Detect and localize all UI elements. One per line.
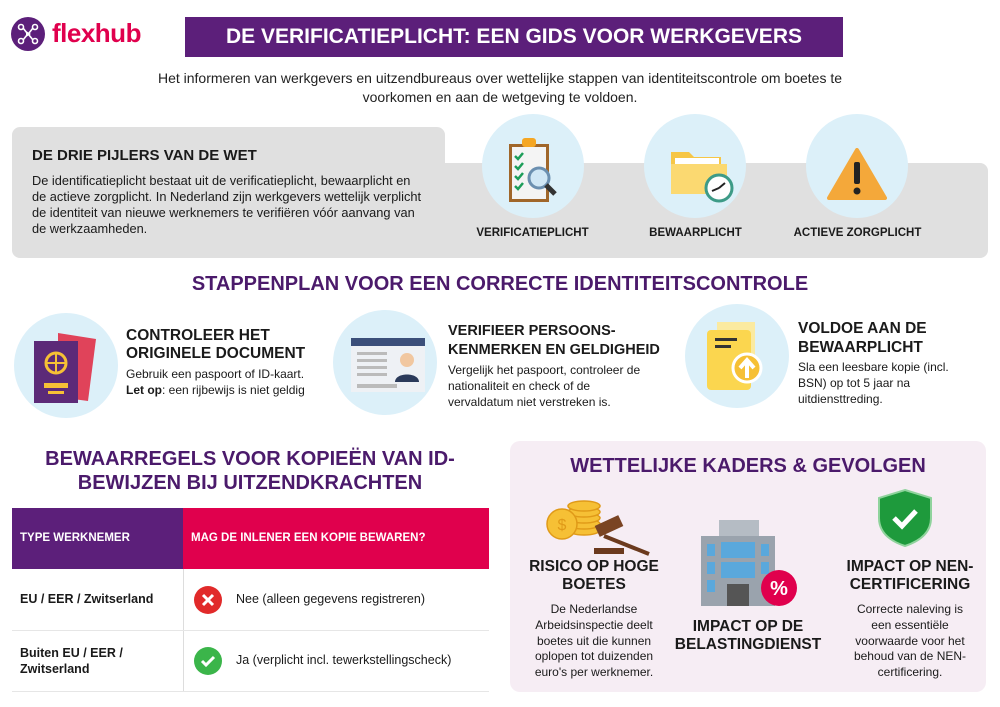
label: actieve zorgplicht: ACTIEVE ZORGPLICHT [794, 227, 921, 239]
row: buiten EU: Zwitserland [20, 662, 89, 676]
heading: verifieer: VERIFIEER PERSOONS- [448, 323, 616, 339]
pillar: bewaarplicht [644, 114, 746, 239]
icon: document upload [707, 322, 762, 390]
heading: controleer [126, 327, 305, 362]
icon: passports [34, 333, 96, 403]
row: EU: EU / EER / Zwitserland [20, 592, 153, 606]
table header [12, 508, 183, 569]
icon: building with percent [701, 520, 797, 606]
table header: TYPE WERKNEMER [20, 532, 130, 544]
label: bewaarplicht: BEWAARPLICHT [649, 227, 742, 239]
icon: warning triangle [827, 148, 887, 200]
row: buiten EU: Buiten EU / EER / [20, 646, 123, 660]
icon: building with percent: % [770, 578, 788, 600]
subtitle: Het informeren van werkgevers en uitzendbureaus over wettelijke stappen van identiteitscontrole om boetes te voorkomen en aan de wetgeving te voldoen. [158, 70, 842, 105]
table: bewaarregels [12, 508, 489, 692]
step 1 [14, 313, 305, 418]
step 2 [333, 310, 660, 415]
text: controleer: Gebruik een paspoort of ID-kaart. [126, 367, 304, 381]
column: NEN [847, 489, 973, 679]
icon: coins and gavel [546, 500, 650, 556]
heading: NEN: IMPACT OP NEN-CERTIFICERING [847, 558, 973, 593]
heading: belastingdienst: IMPACT OP DE BELASTINGDIENST [675, 618, 821, 653]
table: bewaarregels: Ja (verplicht incl. tewerkstellingscheck) [236, 653, 451, 667]
pillar: actieve zorgplicht [794, 114, 922, 239]
heading: wettelijke kaders: WETTELIJKE KADERS & GEVOLGEN [570, 455, 926, 477]
text: voldoe: Sla een leesbare kopie (incl. BSN) op tot 5 jaar na uitdiensttreding. [798, 360, 949, 406]
logo [11, 17, 141, 51]
heading: boetes: RISICO OP HOGE BOETES [529, 558, 659, 593]
row: buiten EU [20, 646, 123, 676]
panel: drie pijlers [12, 127, 988, 258]
table: bewaarregels: Nee (alleen gegevens registreren) [236, 592, 425, 606]
icon: check [194, 647, 222, 675]
heading: controleer: CONTROLEER HET [126, 327, 270, 344]
heading: stappenplan: STAPPENPLAN VOOR EEN CORRECTE IDENTITEITSCONTROLE [192, 273, 808, 295]
heading: voldoe: BEWAARPLICHT [798, 339, 923, 356]
heading: bewaarregels: BEWAARREGELS VOOR KOPIEËN VAN ID-BEWIJZEN BIJ UITZENDKRACHTEN [45, 448, 455, 494]
text: boetes: De Nederlandse Arbeidsinspectie deelt boetes uit die kunnen oplopen tot duizenden euro's per werknemer. [535, 602, 653, 679]
heading: voldoe [798, 320, 927, 356]
icon: clipboard [509, 138, 557, 202]
text: pijlers uitleg: De identificatieplicht bestaat uit de verificatieplicht, bewaarplicht en de actieve zorgplicht. In Nederland zijn werkgevers wettelijk verplicht de identiteit van nieuwe werknemers te verifiëren vóór aanvang van de werkzaamheden. [32, 173, 421, 236]
title [185, 17, 843, 57]
icon: logo mark [11, 17, 45, 51]
icon: shield [878, 489, 932, 547]
icon: folder with clock [671, 152, 734, 202]
title: DE VERIFICATIEPLICHT: EEN GIDS VOOR WERKGEVERS [226, 25, 802, 48]
column: boetes [529, 500, 659, 679]
label: verificatieplicht: VERIFICATIEPLICHT [476, 227, 589, 239]
pillar: verificatieplicht [476, 114, 589, 239]
text: NEN: Correcte naleving is een essentiële voorwaarde voor het behoud van de NEN-certificering. [854, 602, 966, 679]
panel: wettelijke kaders [510, 441, 986, 692]
heading: controleer: ORIGINELE DOCUMENT [126, 345, 305, 362]
step 3 [685, 304, 949, 408]
icon: cross [194, 586, 222, 614]
heading: verifieer: KENMERKEN EN GELDIGHEID [448, 342, 660, 358]
heading: voldoe: VOLDOE AAN DE [798, 320, 927, 337]
text: verifieer: Vergelijk het paspoort, controleer de nationaliteit en check of de vervaldatum niet verstreken is. [448, 363, 640, 409]
brand name: flexhub [52, 18, 141, 48]
icon: id card [351, 338, 425, 392]
text: controleer [126, 367, 305, 397]
column: belastingdienst [675, 520, 822, 653]
heading: verifieer [448, 323, 660, 358]
icon: coins and gavel: $ [558, 517, 567, 534]
text: controleer: Let op: een rijbewijs is niet geldig [126, 383, 305, 397]
table: bewaarregels: MAG DE INLENER EEN KOPIE BEWAREN? [191, 532, 426, 544]
heading: drie pijlers: DE DRIE PIJLERS VAN DE WET [32, 147, 257, 164]
